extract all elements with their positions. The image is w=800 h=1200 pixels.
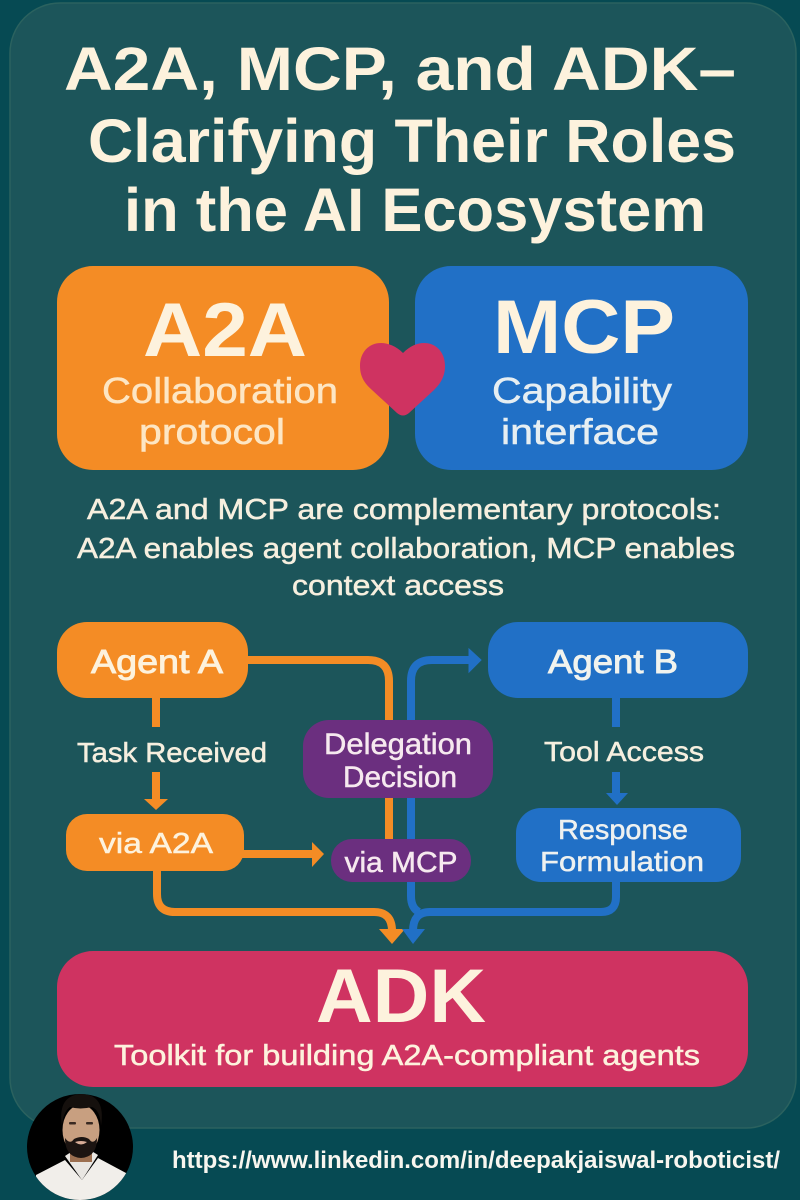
arrow: via A2A to via MCP bbox=[240, 842, 324, 867]
panel: A2A bbox=[57, 266, 389, 470]
arrow: Agent A to via MCP route bbox=[240, 660, 389, 840]
node: via A2A: via A2A bbox=[99, 828, 214, 860]
title: A2A, MCP, and ADK– bbox=[64, 35, 736, 103]
arrow: blue line to Agent B bbox=[411, 649, 481, 912]
node: Delegation Decision: Decision bbox=[343, 761, 457, 794]
panel: ADK: Toolkit for building A2A-compliant agents bbox=[114, 1040, 700, 1072]
panel: ADK bbox=[57, 951, 748, 1087]
icon: portrait avatar bbox=[27, 1094, 133, 1200]
node: Delegation Decision: Delegation bbox=[324, 728, 472, 761]
link text: https://www.linkedin.com/in/deepakjaiswal-roboticist/ bbox=[172, 1147, 780, 1174]
panel: MCP: interface bbox=[501, 411, 659, 452]
arrow: via A2A to ADK bbox=[157, 868, 405, 944]
icon: heart bbox=[360, 343, 445, 416]
panel: A2A: A2A bbox=[143, 288, 307, 373]
label: Tool Access: Tool Access bbox=[544, 736, 704, 767]
node: Response Formulation bbox=[516, 808, 741, 882]
node: via MCP bbox=[331, 839, 471, 882]
node: via A2A bbox=[66, 814, 244, 871]
node: Agent B bbox=[488, 622, 748, 698]
node: Agent A: Agent A bbox=[91, 643, 223, 680]
title bbox=[64, 35, 736, 244]
description text: A2A and MCP are complementary protocols: bbox=[87, 494, 721, 526]
node: via MCP: via MCP bbox=[344, 847, 458, 879]
node: Agent A bbox=[57, 622, 248, 698]
node: Response Formulation: Formulation bbox=[540, 846, 704, 877]
panel: ADK: ADK bbox=[316, 954, 486, 1039]
description text bbox=[77, 494, 735, 602]
description text: A2A enables agent collaboration, MCP enables bbox=[77, 533, 735, 565]
arrow: Agent A down to via A2A bbox=[144, 695, 168, 810]
panel: MCP bbox=[415, 266, 748, 470]
title: Clarifying Their Roles bbox=[88, 107, 736, 175]
arrow: Response to ADK bbox=[402, 880, 616, 944]
node: Delegation Decision bbox=[303, 720, 493, 798]
description text: context access bbox=[292, 570, 504, 602]
panel: A2A: Collaboration bbox=[102, 370, 338, 411]
label: Task Received: Task Received bbox=[77, 737, 267, 768]
title: in the AI Ecosystem bbox=[124, 176, 706, 244]
panel: A2A: protocol bbox=[139, 411, 285, 452]
panel: MCP: Capability bbox=[492, 370, 672, 411]
node: Response Formulation: Response bbox=[558, 814, 688, 845]
panel: MCP: MCP bbox=[493, 285, 675, 370]
arrow: Agent B down to Response bbox=[606, 695, 628, 805]
node: Agent B: Agent B bbox=[548, 643, 678, 680]
